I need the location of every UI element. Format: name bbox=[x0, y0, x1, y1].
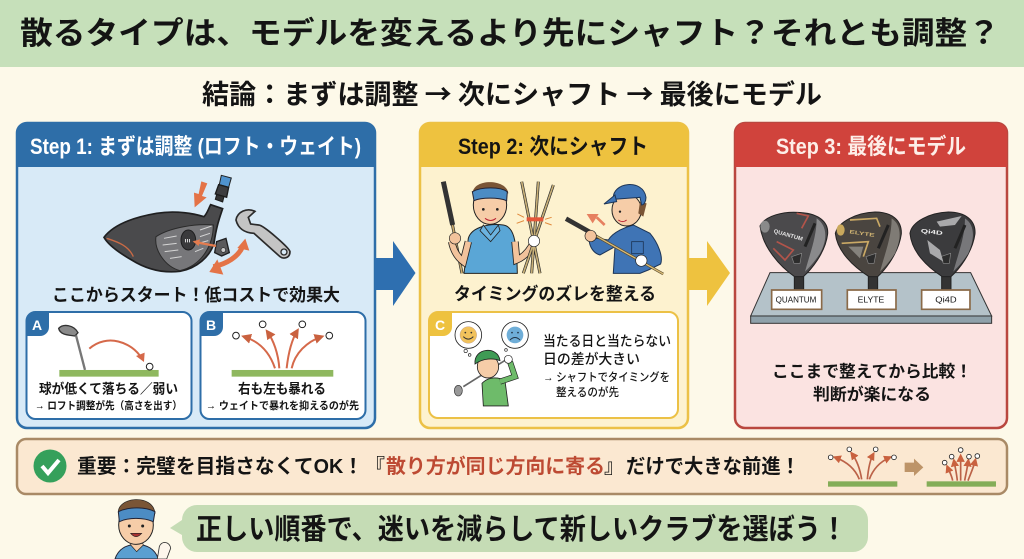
illustration: three drivers on display stand: ELYTE bbox=[858, 295, 885, 305]
sub-panel A bbox=[26, 312, 192, 419]
icon: iron and low ball flight bbox=[59, 325, 159, 377]
character: golfer bbox=[115, 500, 171, 559]
icon: green check bbox=[34, 450, 66, 482]
callout: important note: 『 bbox=[365, 455, 385, 478]
text: issue C: 当たる日と当たらない bbox=[543, 333, 671, 349]
text: compare after tuning bbox=[772, 362, 972, 404]
icon: scatter before and after bbox=[828, 447, 996, 487]
sub-panel C bbox=[429, 312, 678, 418]
illustration: three drivers on display stand: QUANTUM bbox=[773, 229, 804, 243]
step 2 header: Step 2: 次にシャフト bbox=[458, 134, 648, 159]
step 3 header: Step 3: 最後にモデル bbox=[776, 134, 966, 159]
sub-panel A: A bbox=[32, 317, 42, 333]
illustration: three drivers on display stand: Qi4D bbox=[920, 229, 943, 237]
callout: important note: 重要：完璧を目指さなくてOK！ bbox=[77, 455, 363, 478]
icon: scattered shots bbox=[232, 321, 333, 377]
title: 散るタイプは、モデルを変えるより先にシャフト？それとも調整？ bbox=[20, 8, 1000, 53]
step 1 header bbox=[17, 123, 375, 167]
step 1 header: Step 1: まずは調整 (ロフト・ウェイト) bbox=[30, 134, 361, 159]
arrow: step 1 to 2 bbox=[375, 241, 416, 306]
illustration: three drivers on display stand: QUANTUM bbox=[776, 295, 816, 305]
text: start here: ここからスタート！低コストで効果大 bbox=[52, 285, 340, 305]
illustration: golfer and shafts bbox=[443, 182, 663, 274]
illustration: three drivers on display stand: Qi4D bbox=[935, 295, 957, 305]
text: issue C: 日の差が大きい bbox=[543, 351, 640, 367]
speech bubble: 正しい順番で、迷いを減らして新しいクラブを選ぼう！ bbox=[196, 512, 847, 546]
text: issue C: 整えるのが先 bbox=[556, 385, 619, 399]
text: fix the timing: タイミングのズレを整える bbox=[454, 284, 656, 304]
callout: important note bbox=[17, 439, 1007, 494]
sub-panel C: C bbox=[435, 317, 445, 333]
title bbox=[0, 0, 1024, 67]
arrow: step 2 to 3 bbox=[688, 241, 730, 306]
icon: driver head with wrench bbox=[104, 175, 290, 275]
callout: important note: だけで大きな前進！ bbox=[626, 455, 800, 478]
step 2 header bbox=[420, 123, 688, 167]
panel: step 1 bbox=[17, 123, 375, 428]
sub-panel B: 右も左も暴れる bbox=[238, 380, 326, 396]
sub-panel A: → ロフト調整が先（高さを出す） bbox=[35, 399, 182, 412]
icon: golfer with moods bbox=[454, 322, 528, 406]
sub-panel B bbox=[200, 312, 366, 419]
text: compare after tuning: ここまで整えてから比較！ bbox=[772, 362, 972, 381]
panel: step 3 bbox=[735, 123, 1007, 428]
conclusion heading: 結論：まずは調整 → 次にシャフト → 最後にモデル bbox=[202, 73, 822, 112]
speech bubble bbox=[170, 505, 868, 552]
illustration: three drivers on display stand bbox=[751, 212, 992, 323]
sub-panel B: → ウェイトで暴れを抑えるのが先 bbox=[206, 399, 359, 412]
text: issue C bbox=[543, 333, 671, 399]
text: compare after tuning: 判断が楽になる bbox=[813, 384, 931, 404]
illustration: three drivers on display stand: ELYTE bbox=[849, 229, 876, 239]
callout: important note: 』 bbox=[604, 456, 624, 478]
callout: important note: 散り方が同じ方向に寄る bbox=[386, 454, 605, 478]
text: issue C: → シャフトでタイミングを bbox=[543, 370, 670, 384]
panel: step 2 bbox=[420, 123, 688, 428]
step 3 header bbox=[735, 123, 1007, 167]
sub-panel B: B bbox=[206, 317, 216, 333]
sub-panel A: 球が低くて落ちる／弱い bbox=[39, 380, 178, 396]
